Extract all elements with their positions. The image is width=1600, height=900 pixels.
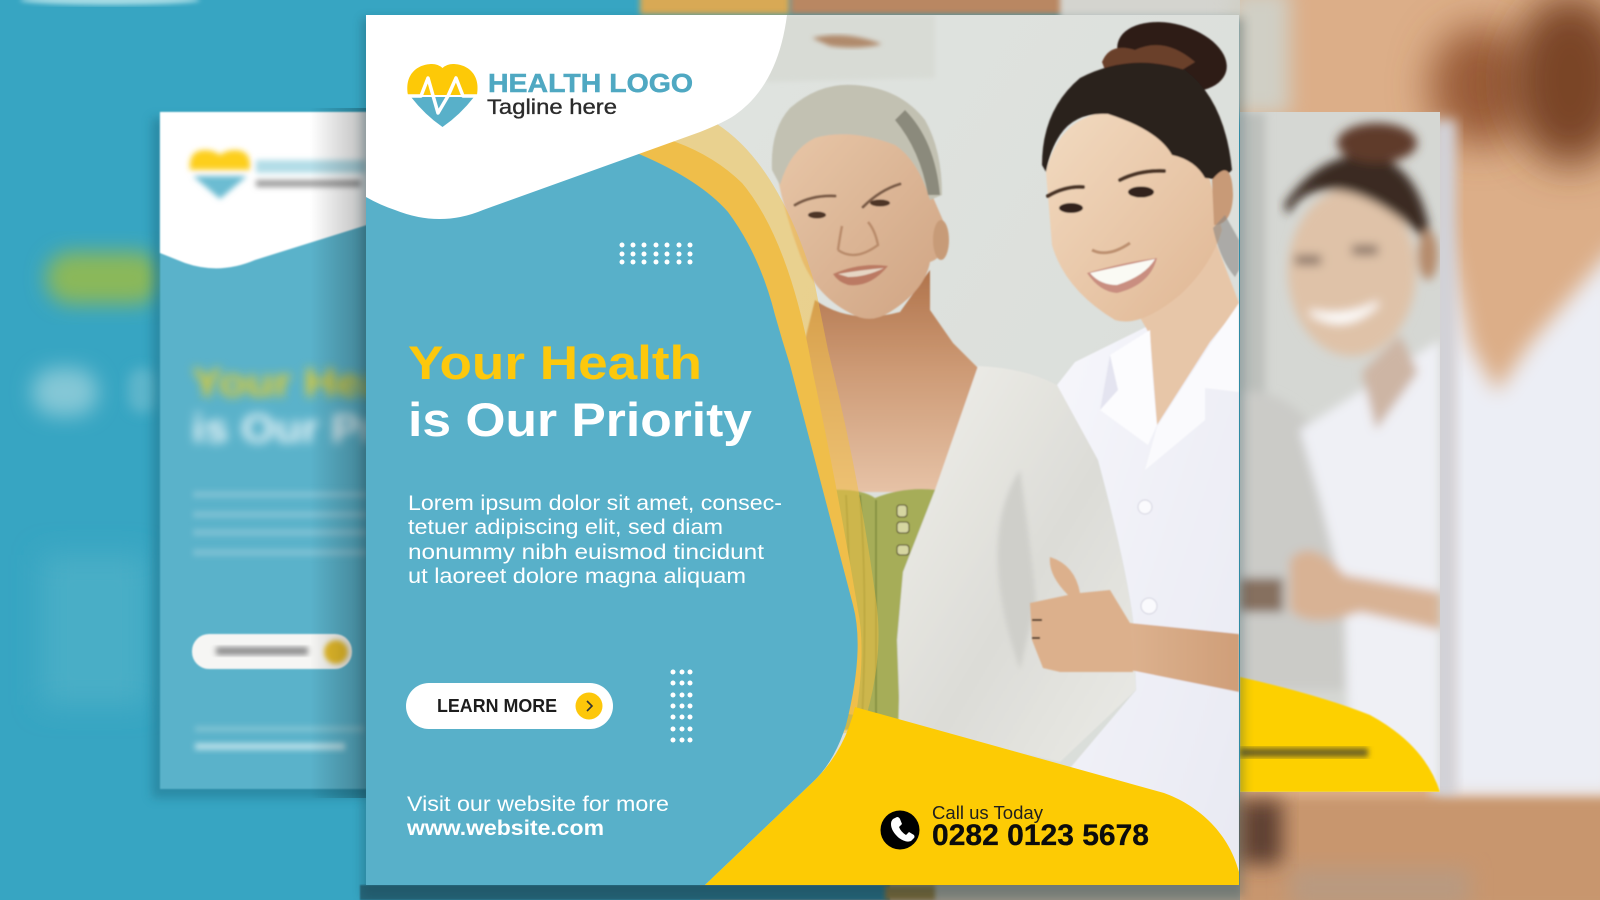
dots decoration top <box>620 242 692 264</box>
blurred back card right <box>1240 112 1440 800</box>
headline: Your Health <box>408 336 702 389</box>
blurred headline: is Our Priority <box>192 407 486 451</box>
blurred cardigan <box>1240 391 1345 690</box>
website block: Visit our website for more <box>407 793 669 816</box>
nurse hand <box>1030 557 1133 672</box>
senior woman nose <box>838 222 878 255</box>
body text: nonummy nibh euismod tincidunt <box>408 541 764 564</box>
senior woman green top <box>828 489 937 730</box>
logo name: HEALTH LOGO <box>488 68 693 98</box>
body text: tetuer adipiscing elit, sed diam <box>408 516 723 539</box>
photo: senior woman <box>772 85 1136 762</box>
blurred back card left <box>152 108 486 798</box>
blurred face <box>1288 188 1416 356</box>
icon: phone <box>880 810 920 850</box>
blurred coat <box>1300 340 1440 800</box>
blue panel <box>366 154 858 885</box>
nurse coat <box>1057 303 1239 885</box>
senior woman cardigan <box>897 366 1136 762</box>
website block: www.website.com <box>406 817 604 840</box>
call label: Call us Today <box>932 803 1043 823</box>
nurse eyes and brows <box>1048 171 1164 196</box>
nurse smile <box>1087 258 1157 293</box>
nurse wispy hair <box>1213 215 1239 277</box>
nurse hair <box>1042 63 1232 180</box>
senior woman mouth <box>833 265 888 285</box>
senior woman ear <box>933 220 949 260</box>
senior woman buttons <box>897 505 909 555</box>
photo: nurse <box>1030 11 1239 885</box>
yellow call panel <box>705 707 1239 885</box>
nurse forearm <box>1130 623 1239 692</box>
nurse ear <box>1212 170 1233 225</box>
nurse collar <box>1100 330 1157 445</box>
senior woman eyes and brows <box>795 184 900 207</box>
translucent yellow wave <box>674 124 878 734</box>
headline <box>408 336 752 446</box>
blurred body lines <box>193 491 368 556</box>
white logo swoosh <box>366 15 787 219</box>
blurred headline: Your Health <box>192 361 442 405</box>
body text: Lorem ipsum dolor sit amet, consec- <box>408 492 782 515</box>
senior woman chest and neck <box>800 270 982 492</box>
nurse nose <box>1092 243 1130 253</box>
website block <box>406 793 669 840</box>
learn more button <box>406 683 613 729</box>
logo <box>406 64 693 127</box>
nurse neck <box>1140 244 1239 425</box>
body text: ut laoreet dolore magna aliquam <box>408 565 746 588</box>
blurred headline <box>192 361 486 451</box>
photo panel: wall and painting <box>660 15 1240 885</box>
blurred button <box>192 634 352 669</box>
main flyer card <box>366 11 1240 885</box>
blurred logo <box>190 150 366 199</box>
contact block <box>880 803 1149 852</box>
blurred web lines <box>195 726 365 750</box>
tagline: Tagline here <box>487 96 617 119</box>
learn more button: LEARN MORE <box>437 696 557 716</box>
dots decoration lower <box>670 670 692 742</box>
main card drop shadow <box>362 18 1244 898</box>
nurse bun <box>1116 21 1228 90</box>
body text <box>408 492 782 588</box>
nurse face <box>1046 112 1222 322</box>
solid amber wave <box>630 130 862 715</box>
headline: is Our Priority <box>408 393 752 446</box>
nurse buttons <box>1138 500 1152 514</box>
senior woman hair <box>772 85 942 200</box>
phone number: 0282 0123 5678 <box>932 819 1149 852</box>
icon: heart with pulse <box>406 64 480 127</box>
senior woman face <box>777 128 946 319</box>
